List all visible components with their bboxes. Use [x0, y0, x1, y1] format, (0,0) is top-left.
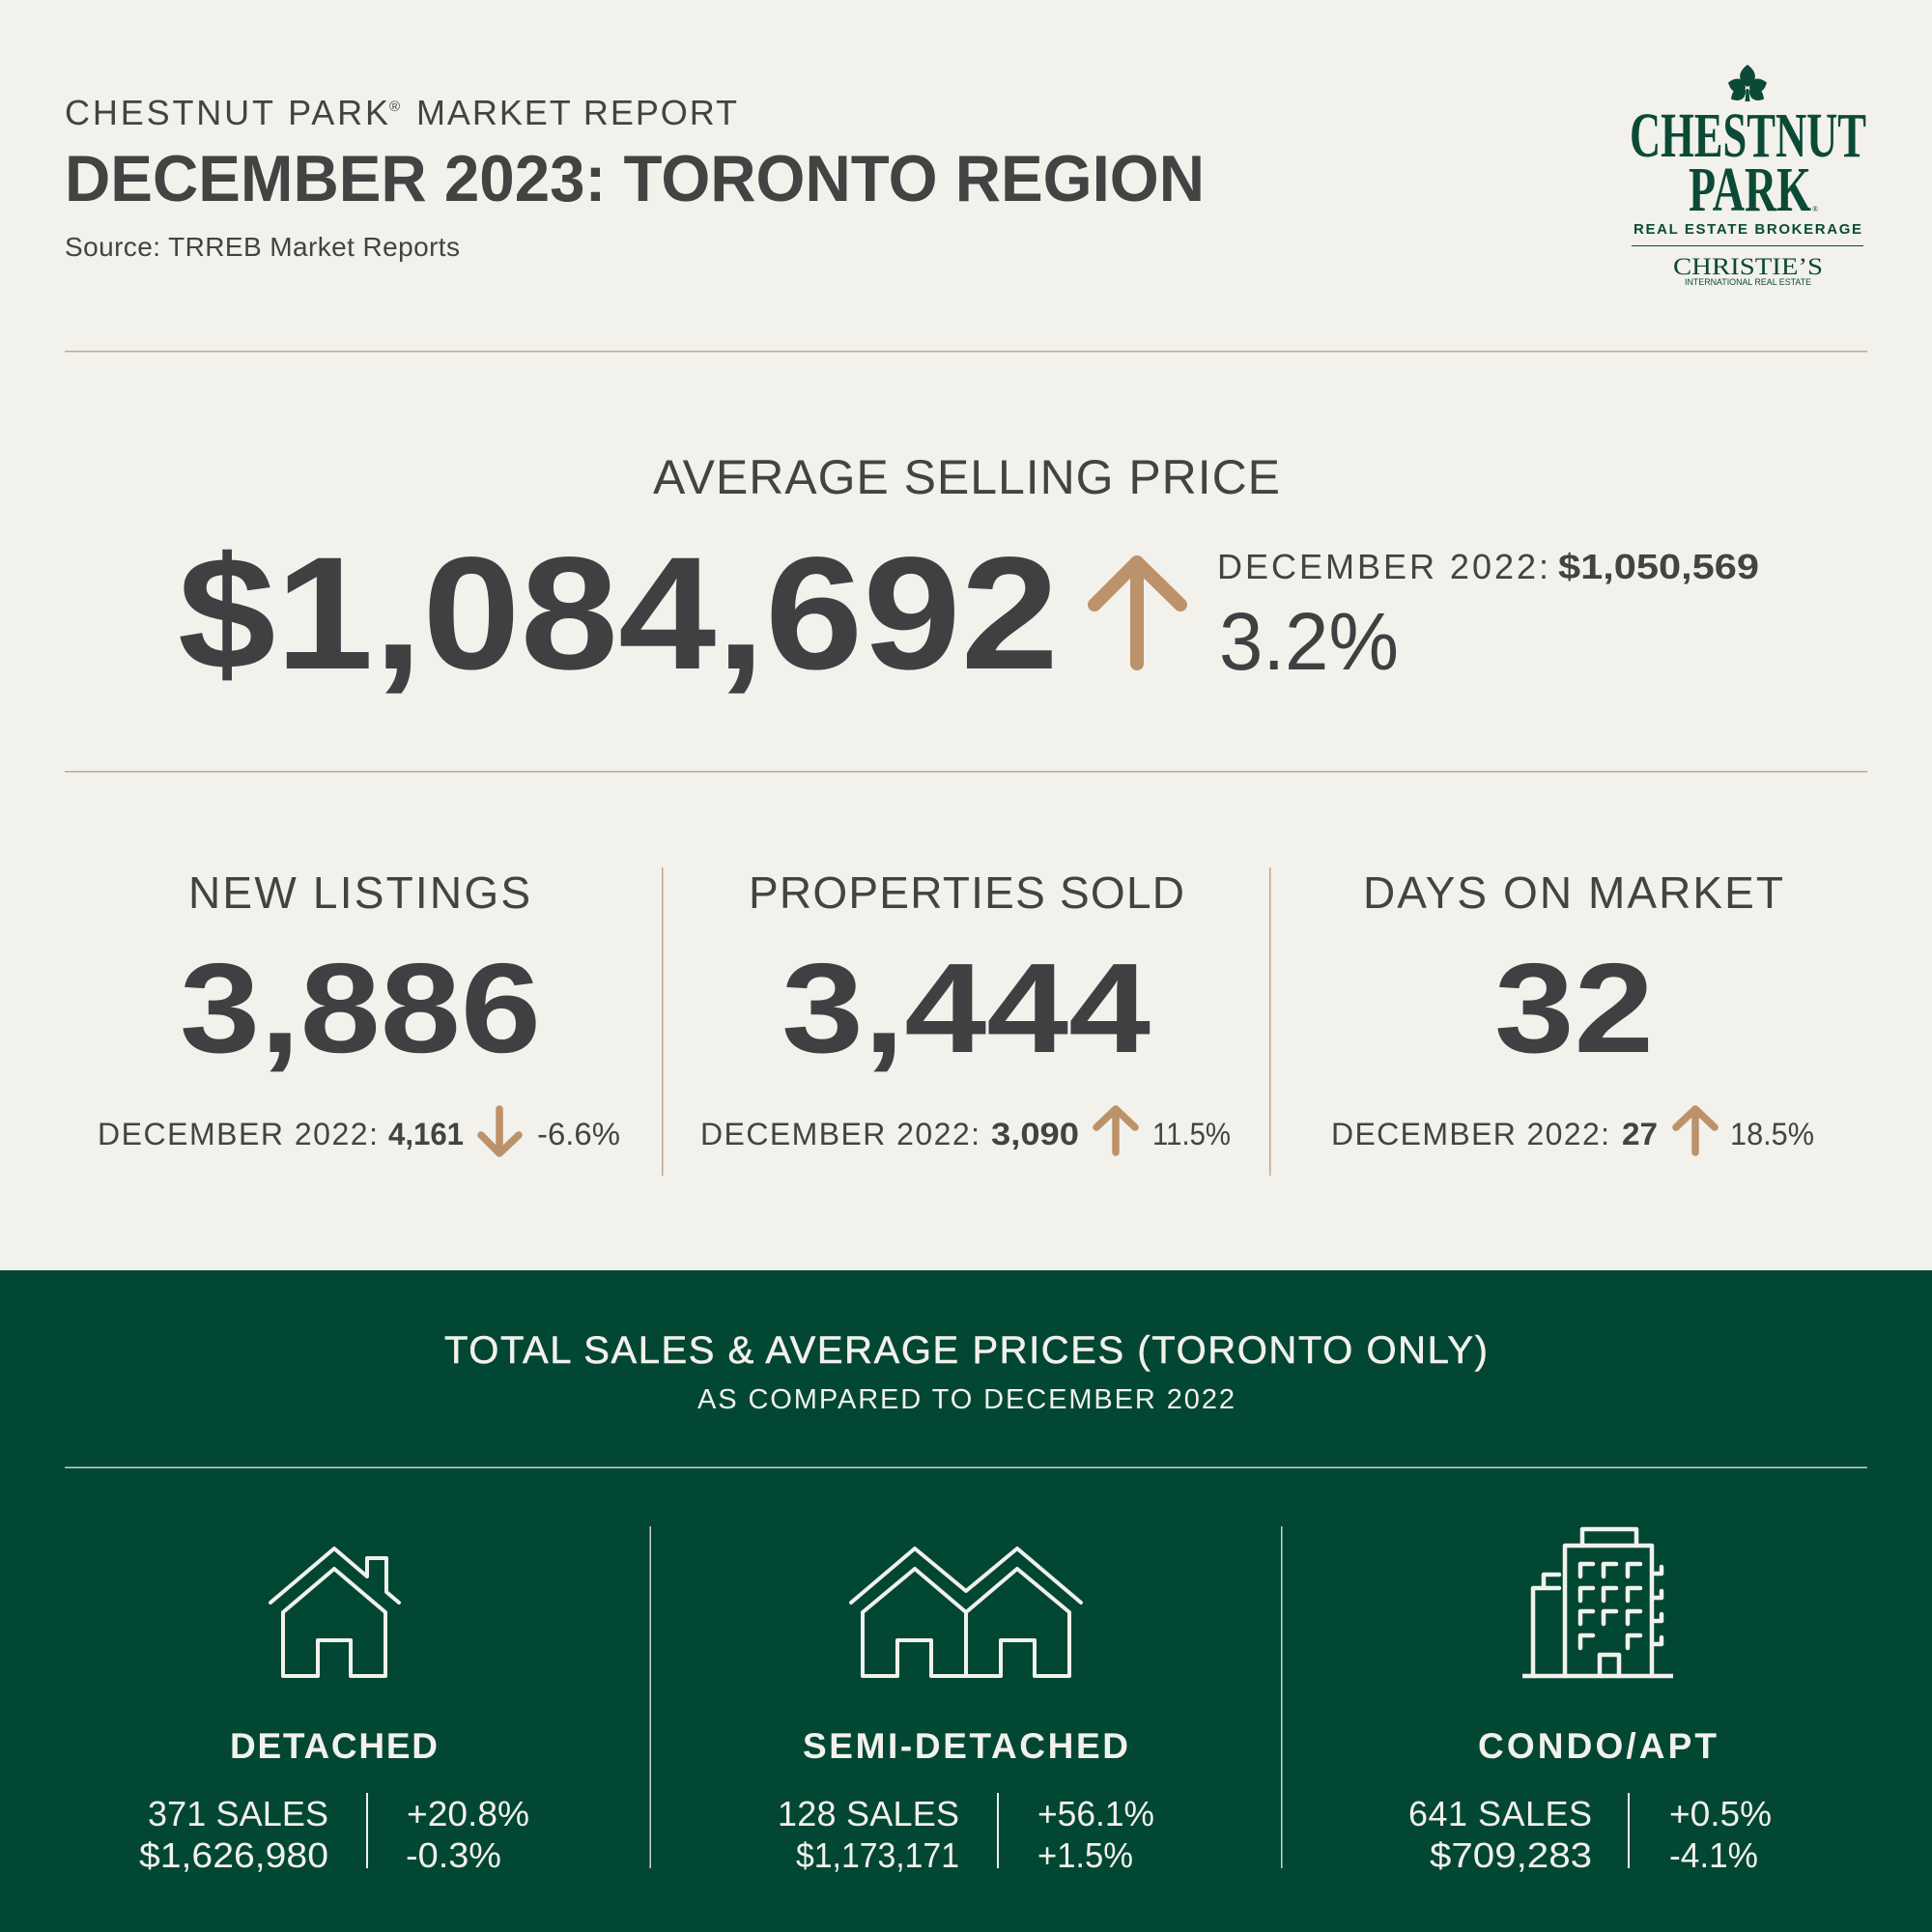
- comparison: 3,090: [991, 1117, 1079, 1151]
- kicker: MARKET REPORT: [416, 93, 737, 132]
- comparison: 4,161: [388, 1117, 464, 1151]
- logo affiliate subtitle: INTERNATIONAL REAL ESTATE: [1685, 277, 1811, 288]
- comparison: 27: [1622, 1117, 1658, 1151]
- sales and price: $1,173,171: [796, 1835, 959, 1875]
- kicker: [65, 93, 737, 132]
- arrow up: [1676, 1109, 1715, 1152]
- comparison value: DECEMBER 2022:: [1217, 547, 1548, 586]
- value: 3,886: [180, 937, 541, 1079]
- comparison: DECEMBER 2022:: [98, 1117, 378, 1151]
- logo affiliate: CHRISTIE’S: [1673, 254, 1823, 280]
- sales and price: [139, 1794, 328, 1875]
- arrow up: [1094, 562, 1180, 664]
- sales and price: 371 SALES: [148, 1794, 328, 1833]
- heading: NEW LISTINGS: [188, 867, 530, 918]
- label: DETACHED: [230, 1726, 438, 1766]
- kicker: CHESTNUT PARK: [65, 93, 388, 132]
- icon: semi-detached houses: [851, 1548, 1081, 1676]
- label: CONDO/APT: [1478, 1726, 1717, 1766]
- icon: house: [270, 1548, 399, 1676]
- logo registered mark: ®: [1812, 205, 1818, 213]
- percent changes: [1669, 1794, 1772, 1875]
- arrow down: [481, 1109, 519, 1153]
- percent changes: +20.8%: [407, 1794, 529, 1833]
- source line: Source: TRREB Market Reports: [65, 232, 460, 262]
- sales and price: [778, 1794, 959, 1875]
- heading: PROPERTIES SOLD: [749, 867, 1184, 918]
- column: condo/apt: [1408, 1529, 1772, 1875]
- panel: new listings: [98, 867, 620, 1153]
- section heading: TOTAL SALES & AVERAGE PRICES (TORONTO ONLY): [444, 1329, 1488, 1372]
- header text block: [65, 93, 1205, 262]
- comparison: DECEMBER 2022:: [700, 1117, 980, 1151]
- sales and price: [1408, 1794, 1592, 1875]
- heading: DAYS ON MARKET: [1363, 867, 1783, 918]
- percent changes: -4.1%: [1669, 1835, 1758, 1875]
- percent change: 3.2%: [1219, 596, 1399, 687]
- title: DECEMBER 2023: TORONTO REGION: [65, 142, 1205, 215]
- sales and price: $1,626,980: [139, 1835, 328, 1875]
- big price: $1,084,692: [178, 525, 1059, 703]
- panel: properties sold: [700, 867, 1231, 1152]
- comparison: DECEMBER 2022:: [1331, 1117, 1609, 1151]
- column: detached: [139, 1548, 529, 1875]
- kicker: ®: [389, 99, 400, 115]
- value: 3,444: [781, 937, 1151, 1079]
- column: semi-detached: [778, 1548, 1154, 1875]
- comparison value: [1217, 547, 1759, 586]
- logo: Chestnut Park: [1630, 65, 1866, 288]
- percent changes: +56.1%: [1037, 1794, 1154, 1833]
- sales and price: $709,283: [1430, 1835, 1592, 1875]
- icon: chestnut leaf: [1726, 65, 1769, 104]
- percent change: 18.5%: [1730, 1117, 1814, 1151]
- logo wordmark second line: PARK: [1689, 155, 1811, 225]
- percent changes: +0.5%: [1669, 1794, 1772, 1833]
- logo rule: [1632, 245, 1863, 246]
- heading: AVERAGE SELLING PRICE: [653, 450, 1280, 504]
- section subheading: AS COMPARED TO DECEMBER 2022: [697, 1384, 1235, 1415]
- arrow up: [1096, 1109, 1135, 1152]
- percent change: -6.6%: [537, 1117, 620, 1151]
- comparison value: $1,050,569: [1558, 547, 1759, 586]
- label: SEMI-DETACHED: [803, 1726, 1128, 1766]
- percent change: 11.5%: [1152, 1117, 1231, 1151]
- logo subtitle: REAL ESTATE BROKERAGE: [1634, 221, 1861, 238]
- panel: total sales and average prices: [0, 1270, 1932, 1932]
- sales and price: 641 SALES: [1408, 1794, 1592, 1833]
- percent changes: [1037, 1794, 1154, 1875]
- percent changes: +1.5%: [1037, 1835, 1133, 1875]
- percent changes: -0.3%: [406, 1835, 501, 1875]
- icon: condo building: [1522, 1529, 1673, 1676]
- sales and price: 128 SALES: [778, 1794, 959, 1833]
- panel: average selling price: [178, 450, 1759, 703]
- panel: days on market: [1331, 867, 1814, 1152]
- value: 32: [1494, 937, 1654, 1079]
- percent changes: [406, 1794, 529, 1875]
